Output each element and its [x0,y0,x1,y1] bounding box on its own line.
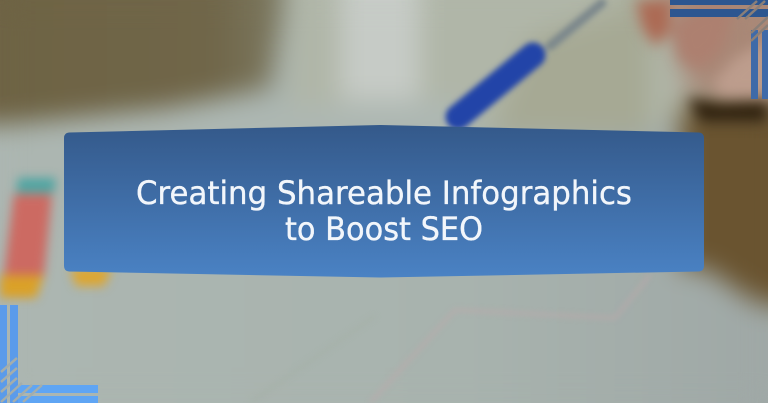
chart bars on paper [0,178,112,298]
decoration: bottom left corner lines [0,305,98,403]
title banner [64,125,704,278]
title: Creating Shareable Infographics [136,174,632,212]
title: to Boost SEO [285,210,483,248]
pen [458,3,602,117]
hand [636,0,768,122]
faint chart lines [250,275,650,403]
title [136,174,632,248]
decoration: top right corner lines [670,0,768,99]
